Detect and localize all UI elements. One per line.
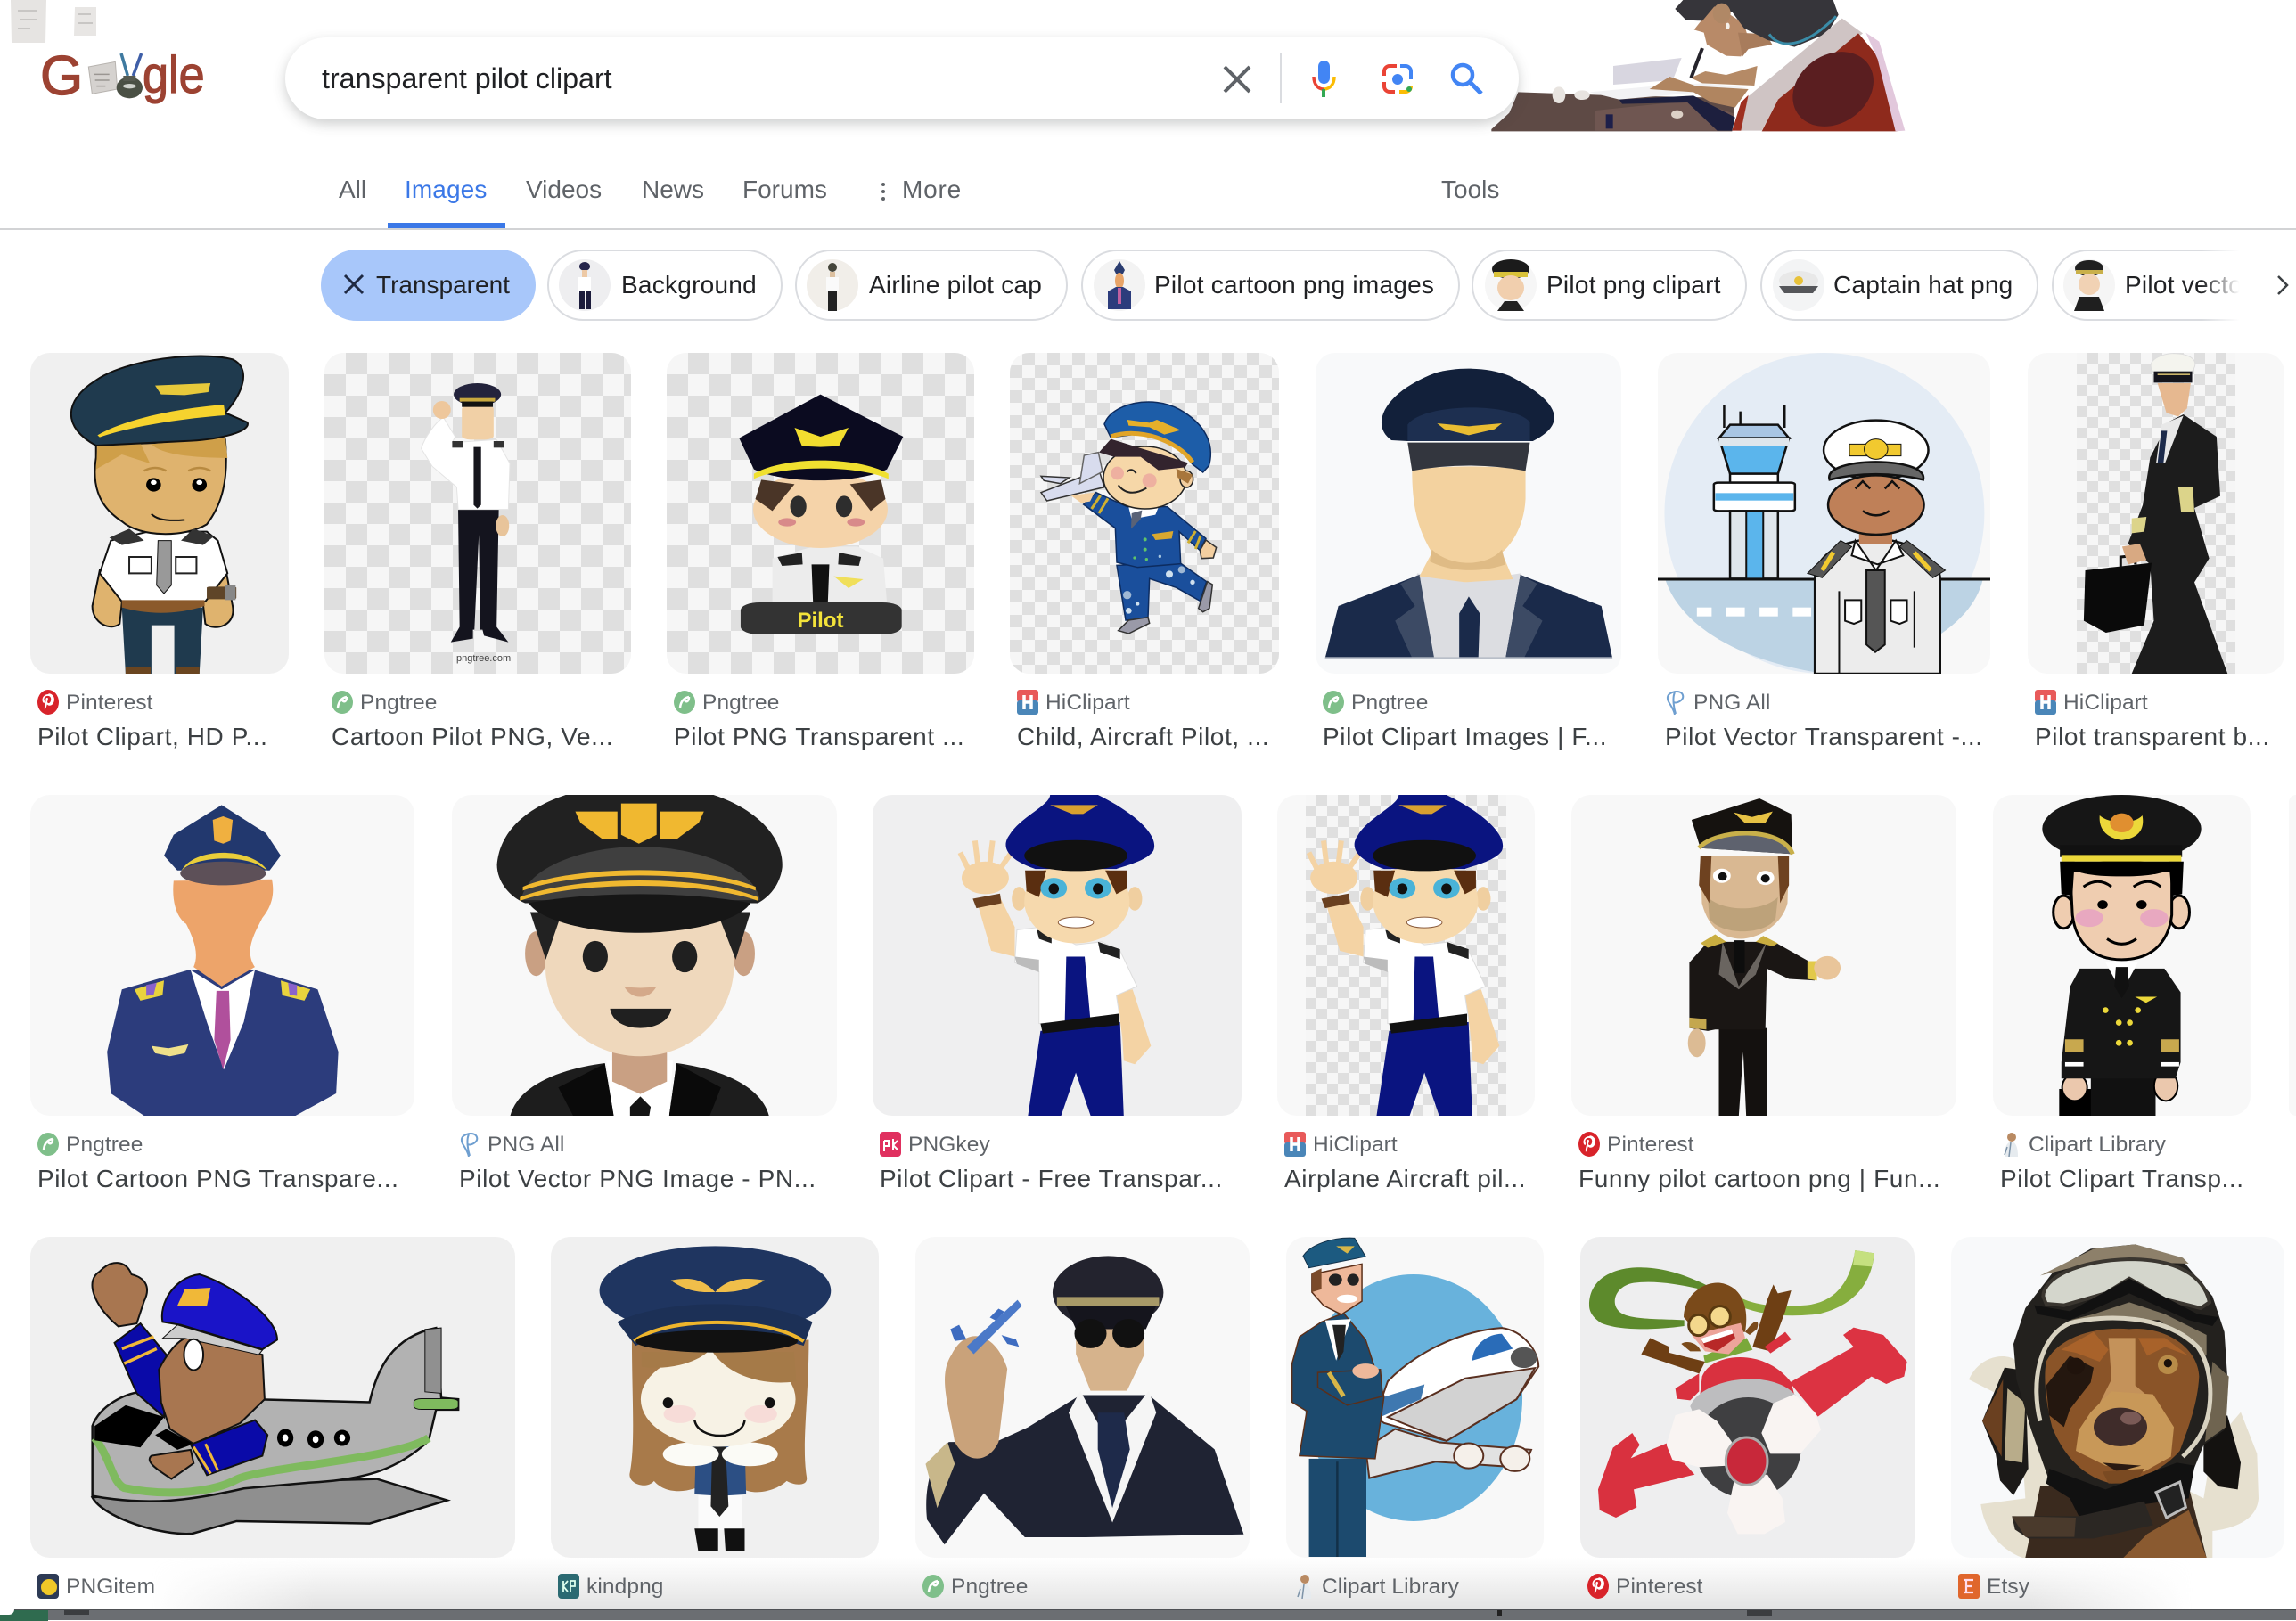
result card: Pilot Cartoon PNG bbox=[37, 805, 399, 1192]
search icons bbox=[1223, 53, 1483, 103]
source icon bbox=[37, 1574, 59, 1599]
result card: Pilot transparent b... bbox=[2035, 353, 2270, 750]
filter chips bbox=[321, 250, 2289, 321]
result card: Pilot Clipart Transp... bbox=[2000, 795, 2244, 1192]
chip arrow bbox=[2277, 275, 2289, 295]
navigation tabs: Images bbox=[405, 176, 487, 203]
result card: Etsy aviator dog bbox=[1951, 1237, 2284, 1611]
result card: Funny pilot cartoon png: Funny pilot cartoon png | Fun... bbox=[1578, 1165, 1940, 1192]
source icon bbox=[1323, 691, 1344, 714]
navigation tabs: Forums bbox=[742, 176, 827, 203]
result card: Pilot Vector Transparent: Pilot Vector Transparent -... bbox=[1665, 723, 1983, 750]
source icon bbox=[460, 1133, 478, 1157]
result card: Pilot Clipart Images: Pilot Clipart Images | F... bbox=[1323, 723, 1607, 750]
bottom window shading bbox=[200, 1572, 2144, 1609]
name plate label: Pilot bbox=[797, 609, 843, 633]
result card: Cartoon Pilot PNG: Pngtree bbox=[360, 691, 438, 715]
watermark: pngtree.com bbox=[456, 653, 511, 664]
result card: Pilot Clipart Transp...: Pilot Clipart Transp... bbox=[2000, 1165, 2244, 1192]
result card: Pilot Clipart Images bbox=[1323, 369, 1613, 750]
result card: Airplane Aircraft pil...: Airplane Aircraft pil... bbox=[1284, 1165, 1526, 1192]
doodle: papers at top left bbox=[11, 0, 96, 43]
result card: Child, Aircraft Pilot: HiClipart bbox=[1046, 691, 1130, 715]
source icon bbox=[37, 1133, 59, 1156]
result card: Pilot transparent b...: HiClipart bbox=[2063, 691, 2148, 715]
result card: Pinterest red plane: Pinterest bbox=[1616, 1575, 1703, 1599]
result card: Cartoon Pilot PNG bbox=[324, 353, 631, 750]
result card: Airplane Aircraft pil...: HiClipart bbox=[1313, 1133, 1398, 1157]
result card: Pngtree pilot with sunglasses: Pngtree bbox=[951, 1575, 1029, 1599]
result card: Pilot Clipart, HD P... bbox=[30, 353, 289, 750]
chip: Airline pilot cap: Airline pilot cap bbox=[869, 271, 1042, 299]
chip: Airline pilot cap bbox=[795, 250, 1068, 321]
result card: Pilot Vector Transparent: PNG All bbox=[1693, 691, 1770, 715]
chip: Background: Background bbox=[621, 271, 757, 299]
source icon bbox=[558, 1574, 579, 1599]
chip: Pilot vector: Pilot vecto bbox=[2125, 271, 2243, 299]
source icon bbox=[880, 1132, 901, 1157]
source icon bbox=[1958, 1574, 1980, 1599]
logo: Google doodle: G bbox=[40, 45, 83, 107]
source icon bbox=[922, 1575, 944, 1598]
result card: PNGitem: PNGitem bbox=[66, 1575, 155, 1599]
doodle: woman writing at a desk bbox=[1491, 0, 1906, 132]
navigation tabs bbox=[0, 176, 2296, 230]
result card: Pilot PNG Transparent bbox=[667, 353, 974, 750]
result card: Pilot Vector PNG Image: Pilot Vector PNG Image - PN... bbox=[459, 1165, 816, 1192]
result card: Pilot Clipart, HD P...: Pinterest bbox=[66, 691, 153, 715]
result card: PNGitem bbox=[30, 1237, 515, 1599]
source icon bbox=[1667, 691, 1685, 715]
navigation tabs: Videos bbox=[526, 176, 602, 203]
result card: kindpng: kindpng bbox=[586, 1575, 664, 1599]
source icon bbox=[1284, 1132, 1306, 1157]
result card: Pinterest red plane bbox=[1580, 1237, 1915, 1611]
result card: Pilot Clipart, HD P...: Pilot Clipart, HD P... bbox=[37, 723, 268, 750]
source icon bbox=[1578, 1132, 1600, 1157]
result card: Child, Aircraft Pilot bbox=[1010, 353, 1279, 750]
source icon bbox=[332, 691, 353, 714]
result card: Pilot Clipart - Free Transpar...: PNGkey bbox=[908, 1133, 990, 1157]
result card: Pilot Vector PNG Image: PNG All bbox=[488, 1133, 564, 1157]
result card: Child, Aircraft Pilot: Child, Aircraft Pilot, ... bbox=[1017, 723, 1269, 750]
chip: Pilot vector bbox=[2052, 250, 2296, 321]
navigation tabs: News bbox=[642, 176, 704, 203]
result card: Pngtree pilot with sunglasses bbox=[922, 1256, 1244, 1599]
chip fade bbox=[2202, 250, 2296, 323]
chip: Captain hat png bbox=[1760, 250, 2038, 321]
logo: Google doodle: gle bbox=[143, 46, 205, 104]
result card: Clipart Library pilot and plane: Clipart Library bbox=[1322, 1575, 1459, 1599]
search box: transparent pilot clipart bbox=[322, 62, 612, 94]
source icon bbox=[1587, 1574, 1609, 1599]
partial next card edge bbox=[2289, 795, 2296, 1116]
result card: Cartoon Pilot PNG: Cartoon Pilot PNG, Ve... bbox=[332, 723, 613, 750]
source icon bbox=[37, 690, 59, 715]
navigation tabs: All bbox=[339, 176, 366, 203]
result card: Airplane Aircraft pil... bbox=[1284, 795, 1526, 1192]
chip: Background bbox=[547, 250, 783, 321]
navigation tabs: More bbox=[902, 176, 962, 203]
result card: Pilot Vector PNG Image bbox=[459, 795, 816, 1192]
result card: Pilot transparent b...: Pilot transparent b... bbox=[2035, 723, 2270, 750]
result card: Pilot PNG Transparent: Pngtree bbox=[702, 691, 780, 715]
chip: Pilot png clipart: Pilot png clipart bbox=[1546, 271, 1721, 299]
chip: Transparent bbox=[321, 250, 536, 321]
result card: Funny pilot cartoon png bbox=[1578, 798, 1940, 1192]
search box bbox=[285, 37, 1519, 119]
result card: Pilot Clipart - Free Transpar... bbox=[873, 795, 1242, 1192]
result card: Pilot Cartoon PNG: Pngtree bbox=[66, 1133, 144, 1157]
source icon bbox=[1293, 1574, 1315, 1599]
chip: Pilot cartoon png images: Pilot cartoon png images bbox=[1154, 271, 1434, 299]
chip: Pilot cartoon png images bbox=[1081, 250, 1460, 321]
result card: Pilot Cartoon PNG: Pilot Cartoon PNG Transpare... bbox=[37, 1165, 399, 1192]
result card: Pilot Clipart Images: Pngtree bbox=[1351, 691, 1429, 715]
source icon bbox=[674, 691, 695, 714]
result card: Clipart Library pilot and plane bbox=[1291, 1237, 1540, 1599]
result card: Funny pilot cartoon png: Pinterest bbox=[1607, 1133, 1694, 1157]
desktop dock strip bbox=[0, 1609, 2296, 1620]
source icon bbox=[1017, 690, 1038, 715]
result card: Etsy aviator dog: Etsy bbox=[1987, 1575, 2030, 1599]
logo: Google doodle bbox=[40, 45, 205, 107]
result card: Pilot Vector Transparent bbox=[1658, 353, 1990, 750]
chip: Pilot png clipart bbox=[1472, 250, 1747, 321]
source icon bbox=[2004, 1133, 2018, 1157]
navigation tabs: Tools bbox=[1441, 176, 1499, 203]
result card: Pilot Clipart - Free Transpar...: Pilot Clipart - Free Transpar... bbox=[880, 1165, 1223, 1192]
chip: Transparent: Transparent bbox=[376, 271, 510, 299]
source icon bbox=[2035, 690, 2056, 715]
result card: Pilot PNG Transparent: Pilot PNG Transparent ... bbox=[674, 723, 964, 750]
result card: kindpng bbox=[551, 1237, 879, 1599]
result card: Pilot Clipart Transp...: Clipart Library bbox=[2029, 1133, 2166, 1157]
chip: Captain hat png: Captain hat png bbox=[1833, 271, 2013, 299]
